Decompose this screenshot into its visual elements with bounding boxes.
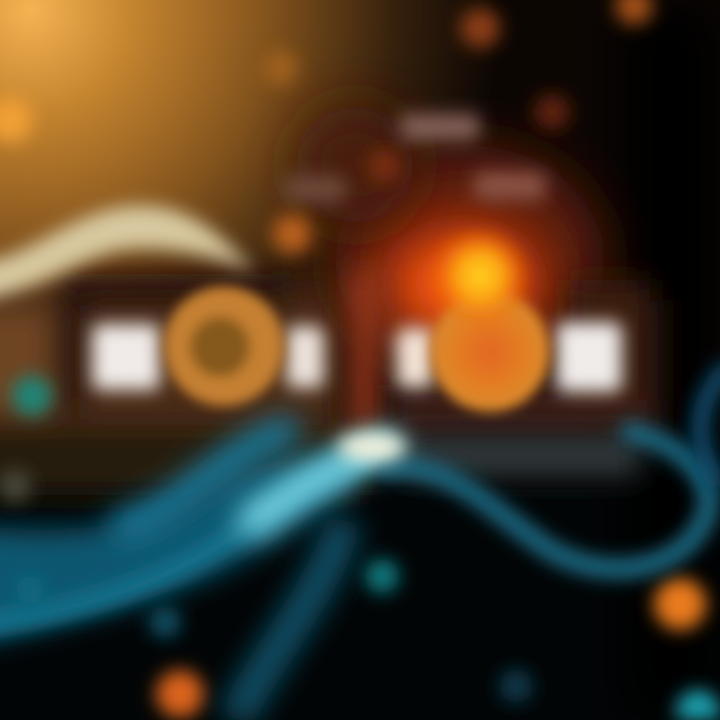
strand: right wave bbox=[385, 432, 709, 569]
strand: lower left wave bbox=[0, 450, 380, 625]
left ring bbox=[164, 286, 284, 406]
right ring bbox=[430, 292, 550, 412]
strand: upper left wave bbox=[125, 432, 285, 525]
brown left band bbox=[0, 275, 360, 495]
orange haze around sun bbox=[295, 105, 605, 375]
strand: far right edge bbox=[701, 370, 720, 480]
sun core bbox=[428, 224, 532, 328]
hazy grey labels bbox=[284, 114, 546, 202]
teal bokeh dots bbox=[0, 376, 720, 720]
teal flowing strands bbox=[0, 370, 720, 720]
bright center highlight bbox=[338, 432, 406, 462]
cream wave shape bbox=[0, 206, 256, 300]
strand: bright center bbox=[255, 445, 385, 520]
dark right area bbox=[620, 0, 720, 720]
central vertical orange column bbox=[350, 270, 380, 430]
right dark grey band bbox=[400, 436, 640, 476]
right brown band bbox=[390, 280, 664, 435]
strand: vertical descending bbox=[235, 520, 345, 720]
teal wave lower left mass bbox=[0, 450, 350, 645]
white blocks bbox=[92, 322, 622, 392]
dark lower area bbox=[0, 450, 720, 720]
